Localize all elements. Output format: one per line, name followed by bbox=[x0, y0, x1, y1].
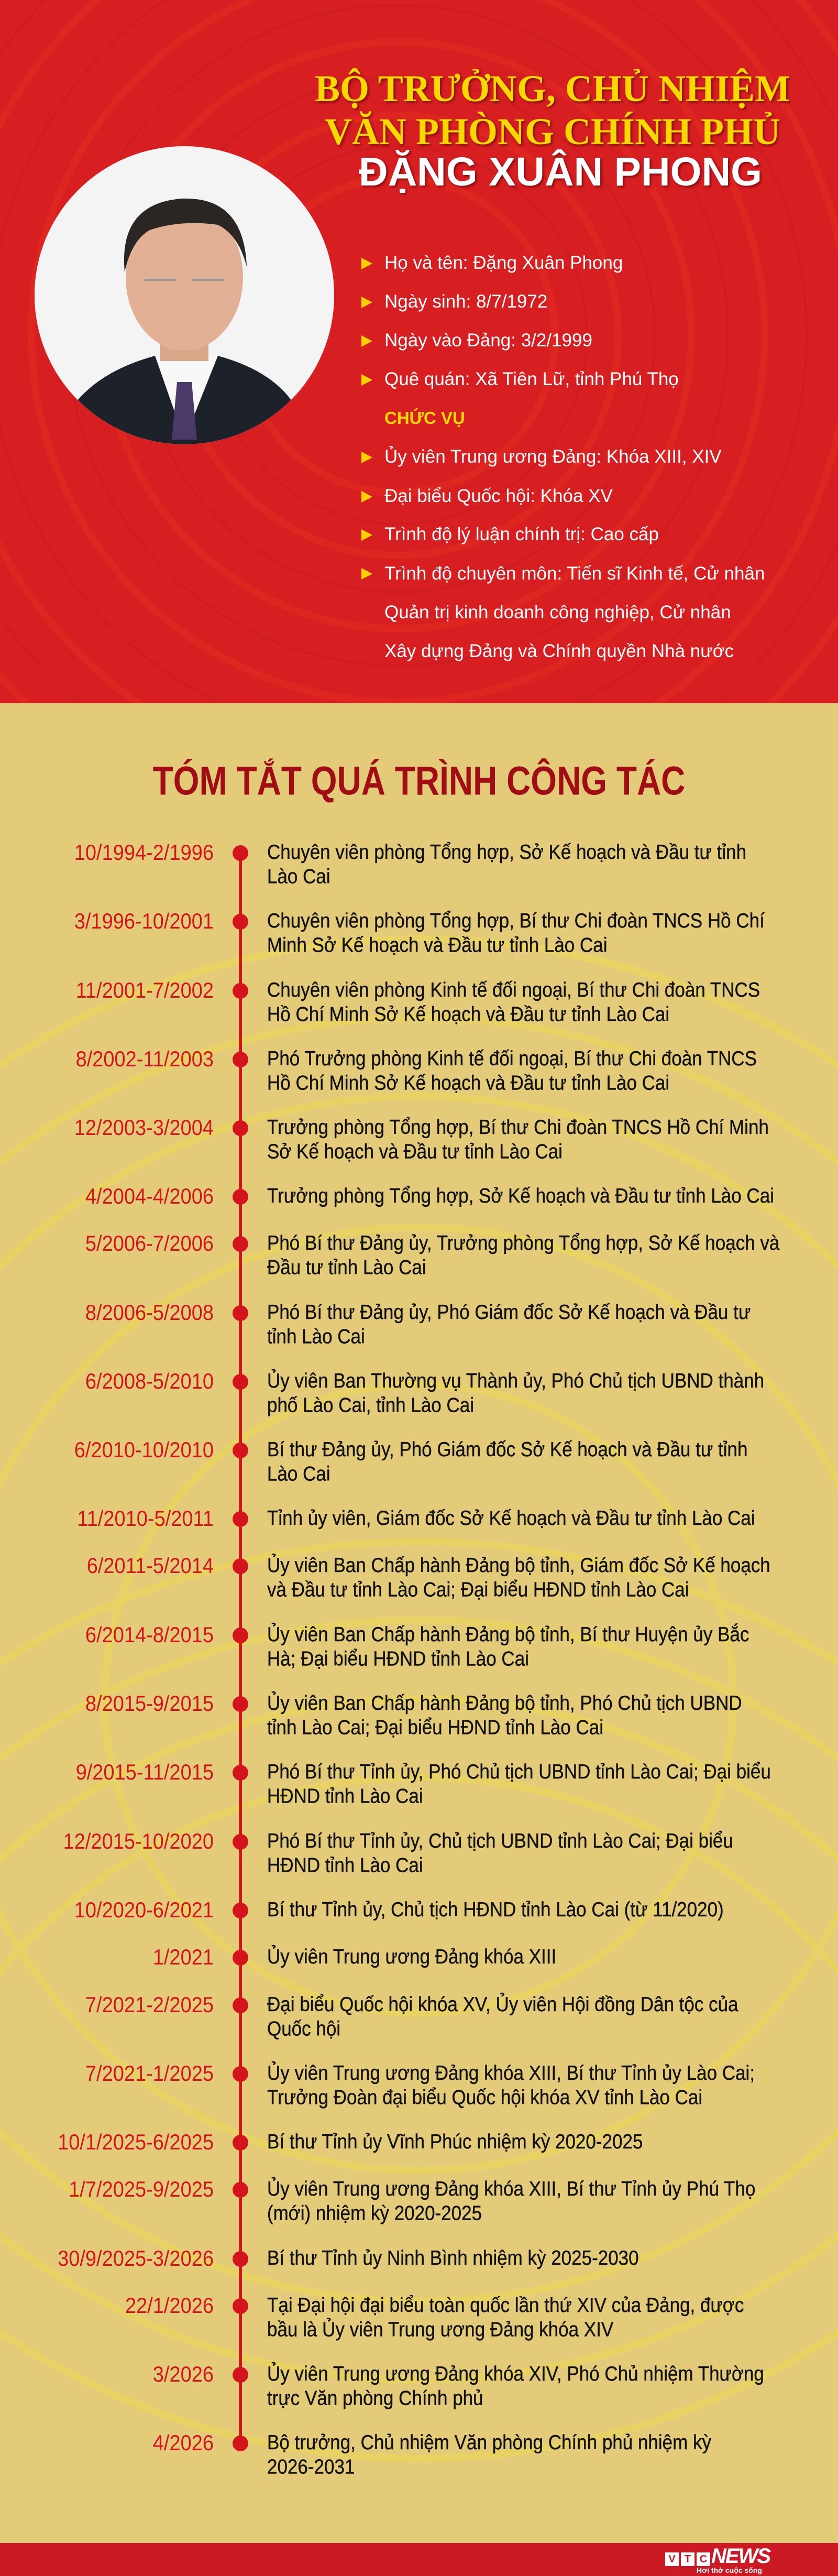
timeline entries: 11/2010-5/2011 bbox=[77, 1507, 214, 1531]
timeline entries: Quốc hội bbox=[267, 2017, 340, 2040]
timeline entries: tỉnh Lào Cai bbox=[267, 1325, 365, 1348]
timeline entries: 30/9/2025-3/2026 bbox=[58, 2247, 214, 2271]
timeline entries: 8/2006-5/2008 bbox=[85, 1301, 214, 1325]
entry 24 bbox=[125, 2294, 744, 2341]
title: position: VĂN PHÒNG CHÍNH PHỦ bbox=[325, 111, 780, 152]
timeline entries: và Đầu tư tỉnh Lào Cai; Đại biểu HĐND tỉnh Lào Cai bbox=[267, 1578, 689, 1601]
entry 19 bbox=[85, 1992, 738, 2040]
info: birth bbox=[361, 291, 547, 312]
portrait photo bbox=[35, 146, 334, 444]
timeline entries: 7/2021-2/2025 bbox=[85, 1993, 214, 2017]
header panel bbox=[0, 0, 838, 703]
timeline entries: Trưởng phòng Tổng hợp, Bí thư Chi đoàn TNCS Hồ Chí Minh bbox=[267, 1116, 769, 1139]
timeline line bbox=[239, 853, 242, 2443]
timeline entries: Chuyên viên phòng Tổng hợp, Bí thư Chi đoàn TNCS Hồ Chí bbox=[267, 910, 765, 932]
title: position bbox=[315, 68, 792, 152]
timeline entries: 1/7/2025-9/2025 bbox=[69, 2178, 214, 2202]
title: position: BỘ TRƯỞNG, CHỦ NHIỆM bbox=[315, 68, 790, 110]
entry 9 bbox=[85, 1369, 764, 1416]
timeline entries: Chuyên viên phòng Kinh tế đối ngoại, Bí thư Chi đoàn TNCS bbox=[267, 979, 760, 1001]
timeline entries: HĐND tỉnh Lào Cai bbox=[267, 1854, 423, 1876]
timeline entries: 3/2026 bbox=[153, 2363, 214, 2387]
timeline entries: 6/2008-5/2010 bbox=[85, 1370, 214, 1394]
logo: VTC News: T bbox=[685, 2553, 691, 2565]
personal info list: Ngày sinh: 8/7/1972 bbox=[384, 291, 547, 312]
section heading: TÓM TẮT QUÁ TRÌNH CÔNG TÁC bbox=[153, 758, 685, 803]
entry 15 bbox=[76, 1761, 771, 1807]
entry 14 bbox=[85, 1691, 742, 1739]
timeline entries: 22/1/2026 bbox=[125, 2294, 214, 2318]
heading: positions: CHỨC VỤ bbox=[384, 408, 465, 428]
logo: VTC News: C bbox=[700, 2553, 707, 2565]
timeline entries: Ủy viên Ban Chấp hành Đảng bộ tỉnh, Phó Chủ tịch UBND bbox=[267, 1692, 742, 1715]
entry 3 bbox=[76, 979, 760, 1025]
timeline entries: Minh Sở Kế hoạch và Đầu tư tỉnh Lào Cai bbox=[267, 934, 608, 956]
timeline entries: 3/1996-10/2001 bbox=[74, 910, 214, 934]
title: name: ĐẶNG XUÂN PHONG bbox=[359, 149, 762, 194]
timeline entries: Lào Cai bbox=[267, 865, 330, 888]
personal info list: Ủy viên Trung ương Đảng: Khóa XIII, XIV bbox=[384, 446, 722, 467]
yellow background pattern bbox=[0, 935, 838, 2462]
timeline entries: Ủy viên Ban Chấp hành Đảng bộ tỉnh, Bí thư Huyện ủy Bắc bbox=[267, 1623, 749, 1646]
timeline entries: 8/2002-11/2003 bbox=[76, 1047, 214, 1072]
timeline entries: Phó Bí thư Đảng ủy, Trưởng phòng Tổng hợp, Sở Kế hoạch và bbox=[267, 1232, 779, 1254]
info: party bbox=[361, 330, 592, 351]
personal info list: Trình độ chuyên môn: Tiến sĩ Kinh tế, Cử nhân bbox=[384, 563, 765, 584]
entry 1 bbox=[74, 841, 746, 888]
info: hometown bbox=[361, 369, 679, 389]
timeline entries: 4/2026 bbox=[153, 2431, 214, 2455]
timeline entries: 11/2001-7/2002 bbox=[76, 979, 214, 1003]
timeline entries: Trưởng Đoàn đại biểu Quốc hội khóa XV tỉnh Lào Cai bbox=[267, 2086, 702, 2109]
entry 23 bbox=[58, 2247, 639, 2271]
footer bar bbox=[0, 2543, 838, 2576]
personal info list: Họ và tên: Đặng Xuân Phong bbox=[384, 253, 623, 273]
entry 2 bbox=[74, 910, 765, 956]
timeline entries: Hà; Đại biểu HĐND tỉnh Lào Cai bbox=[267, 1647, 529, 1670]
timeline entries: Phó Trưởng phòng Kinh tế đối ngoại, Bí thư Chi đoàn TNCS bbox=[267, 1047, 757, 1070]
timeline entries: tỉnh Lào Cai; Đại biểu HĐND tỉnh Lào Cai bbox=[267, 1716, 603, 1739]
entry 25 bbox=[153, 2362, 764, 2409]
personal info list: Quê quán: Xã Tiên Lữ, tỉnh Phú Thọ bbox=[384, 369, 679, 389]
entry 17 bbox=[74, 1898, 724, 1923]
timeline entries: Đầu tư tỉnh Lào Cai bbox=[267, 1256, 426, 1279]
timeline entries: 6/2010-10/2010 bbox=[74, 1438, 214, 1462]
timeline entries: 6/2011-5/2014 bbox=[87, 1554, 214, 1578]
entry 6 bbox=[85, 1185, 774, 1209]
timeline entries: 10/1994-2/1996 bbox=[74, 841, 214, 865]
info: name bbox=[361, 253, 623, 273]
timeline entries: Ủy viên Ban Thường vụ Thành ủy, Phó Chủ tịch UBND thành bbox=[267, 1370, 764, 1392]
personal info list: Ngày vào Đảng: 3/2/1999 bbox=[384, 330, 592, 351]
entry 12 bbox=[87, 1553, 770, 1601]
entry 18 bbox=[153, 1945, 556, 1970]
timeline entries: 12/2003-3/2004 bbox=[74, 1116, 214, 1140]
timeline entries: trực Văn phòng Chính phủ bbox=[267, 2387, 483, 2409]
logo: VTC News: Hơi thở cuộc sống bbox=[697, 2566, 762, 2574]
timeline entries: Ủy viên Trung ương Đảng khóa XIV, Phó Chủ nhiệm Thường bbox=[267, 2363, 764, 2385]
logo: VTC News: NEWS bbox=[711, 2545, 770, 2568]
timeline entries: Ủy viên Trung ương Đảng khóa XIII bbox=[267, 1946, 556, 1968]
entry 11 bbox=[77, 1507, 755, 1531]
timeline entries: Tỉnh ủy viên, Giám đốc Sở Kế hoạch và Đầu tư tỉnh Lào Cai bbox=[267, 1507, 755, 1530]
timeline entries: Bí thư Tỉnh ủy, Chủ tịch HĐND tỉnh Lào Cai (từ 11/2020) bbox=[267, 1898, 724, 1921]
timeline entries: 7/2021-1/2025 bbox=[85, 2062, 214, 2086]
entry 5 bbox=[74, 1116, 769, 1163]
timeline entries: Bí thư Tỉnh ủy Ninh Bình nhiệm kỳ 2025-2030 bbox=[267, 2247, 639, 2269]
entry 22 bbox=[69, 2177, 755, 2224]
timeline entries: 8/2015-9/2015 bbox=[85, 1692, 214, 1716]
personal info list: Trình độ lý luận chính trị: Cao cấp bbox=[384, 524, 659, 544]
timeline entries: Đại biểu Quốc hội khóa XV, Ủy viên Hội đồng Dân tộc của bbox=[267, 1993, 738, 2016]
timeline entries: Chuyên viên phòng Tổng hợp, Sở Kế hoạch và Đầu tư tỉnh bbox=[267, 841, 746, 864]
timeline entries: 2026-2031 bbox=[267, 2455, 355, 2478]
personal info list bbox=[361, 253, 765, 661]
timeline entries: Ủy viên Trung ương Đảng khóa XIII, Bí thư Tỉnh ủy Lào Cai; bbox=[267, 2062, 755, 2084]
info: political theory bbox=[361, 524, 659, 544]
timeline entries: phố Lào Cai, tỉnh Lào Cai bbox=[267, 1394, 474, 1416]
timeline entries: 6/2014-8/2015 bbox=[85, 1623, 214, 1647]
timeline entries: (mới) nhiệm kỳ 2020-2025 bbox=[267, 2202, 482, 2224]
timeline entries: Phó Bí thư Tỉnh ủy, Chủ tịch UBND tỉnh Lào Cai; Đại biểu bbox=[267, 1830, 733, 1852]
personal info list: Quản trị kinh doanh công nghiệp, Cử nhân bbox=[384, 602, 731, 623]
timeline entries: 10/2020-6/2021 bbox=[74, 1898, 214, 1923]
timeline entries: Bí thư Tỉnh ủy Vĩnh Phúc nhiệm kỳ 2020-2025 bbox=[267, 2131, 643, 2153]
timeline entries: Ủy viên Trung ương Đảng khóa XIII, Bí thư Tỉnh ủy Phú Thọ bbox=[267, 2178, 755, 2200]
personal info list: Đại biểu Quốc hội: Khóa XV bbox=[384, 486, 613, 506]
logo: VTC News: V bbox=[668, 2553, 676, 2565]
timeline entries: HĐND tỉnh Lào Cai bbox=[267, 1785, 423, 1807]
timeline entries: Bộ trưởng, Chủ nhiệm Văn phòng Chính phủ nhiệm kỳ bbox=[267, 2431, 711, 2454]
entry 10 bbox=[74, 1438, 747, 1485]
timeline entries: Lào Cai bbox=[267, 1462, 330, 1485]
timeline entries: Ủy viên Ban Chấp hành Đảng bộ tỉnh, Giám đốc Sở Kế hoạch bbox=[267, 1554, 770, 1577]
timeline entries: Phó Bí thư Đảng ủy, Phó Giám đốc Sở Kế hoạch và Đầu tư bbox=[267, 1301, 751, 1324]
info: education bbox=[361, 563, 765, 661]
timeline entries: Tại Đại hội đại biểu toàn quốc lần thứ XIV của Đảng, được bbox=[267, 2294, 744, 2317]
entry 8 bbox=[85, 1301, 751, 1348]
timeline entries: Hồ Chí Minh Sở Kế hoạch và Đầu tư tỉnh Lào Cai bbox=[267, 1003, 669, 1025]
timeline entries: Bí thư Đảng ủy, Phó Giám đốc Sở Kế hoạch và Đầu tư tỉnh bbox=[267, 1438, 747, 1461]
timeline entries: Trưởng phòng Tổng hợp, Sở Kế hoạch và Đầu tư tỉnh Lào Cai bbox=[267, 1185, 774, 1207]
info: central committee bbox=[361, 446, 722, 467]
timeline entries: bầu là Ủy viên Trung ương Đảng khóa XIV bbox=[267, 2318, 613, 2341]
info: national assembly bbox=[361, 486, 613, 506]
entry 7 bbox=[85, 1232, 780, 1279]
logo: VTC News bbox=[665, 2546, 786, 2575]
entry 26 bbox=[153, 2431, 711, 2478]
timeline entries: 10/1/2025-6/2025 bbox=[58, 2131, 214, 2155]
timeline entries: 9/2015-11/2015 bbox=[76, 1761, 214, 1785]
entry 13 bbox=[85, 1622, 749, 1670]
timeline entries: Sở Kế hoạch và Đầu tư tỉnh Lào Cai bbox=[267, 1140, 563, 1163]
timeline entries: 12/2015-10/2020 bbox=[63, 1830, 214, 1854]
entry 21 bbox=[58, 2131, 643, 2155]
timeline entries: Hồ Chí Minh Sở Kế hoạch và Đầu tư tỉnh Lào Cai bbox=[267, 1072, 669, 1094]
entry 4 bbox=[76, 1047, 757, 1094]
personal info list: Xây dựng Đảng và Chính quyền Nhà nước bbox=[384, 641, 734, 661]
timeline entries: 4/2004-4/2006 bbox=[85, 1185, 214, 1209]
timeline entries: 1/2021 bbox=[153, 1946, 214, 1970]
timeline entries: 5/2006-7/2006 bbox=[85, 1232, 214, 1256]
timeline entries: Phó Bí thư Tỉnh ủy, Phó Chủ tịch UBND tỉnh Lào Cai; Đại biểu bbox=[267, 1761, 771, 1783]
entry 20 bbox=[85, 2061, 755, 2109]
entry 16 bbox=[63, 1830, 733, 1876]
